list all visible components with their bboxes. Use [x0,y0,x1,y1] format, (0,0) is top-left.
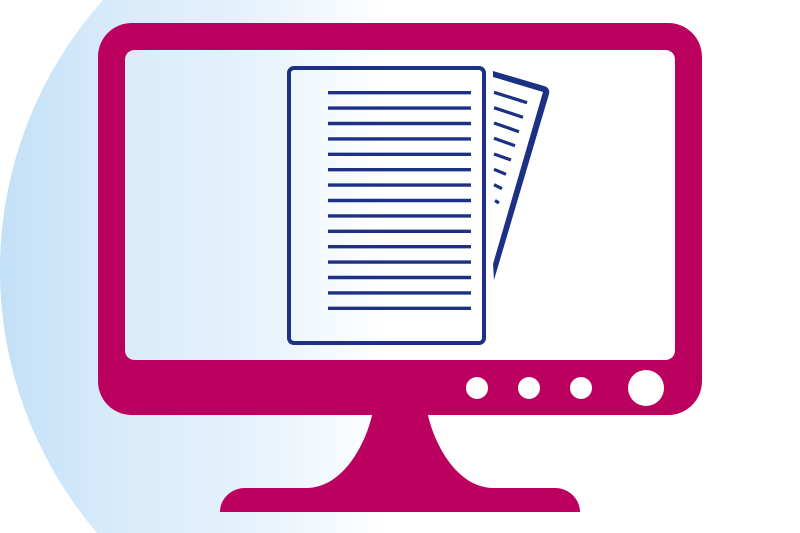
icon: document back page [493,71,549,280]
background circle [0,0,400,533]
icon: computer monitor [98,23,702,512]
back page text lines [494,92,527,203]
monitor stand [220,413,580,512]
monitor frame [98,23,702,415]
page text lines [328,93,471,308]
icon: document front page [289,68,484,343]
back page outline [493,71,549,280]
monitor buttons [466,370,664,406]
page outline [289,68,484,343]
